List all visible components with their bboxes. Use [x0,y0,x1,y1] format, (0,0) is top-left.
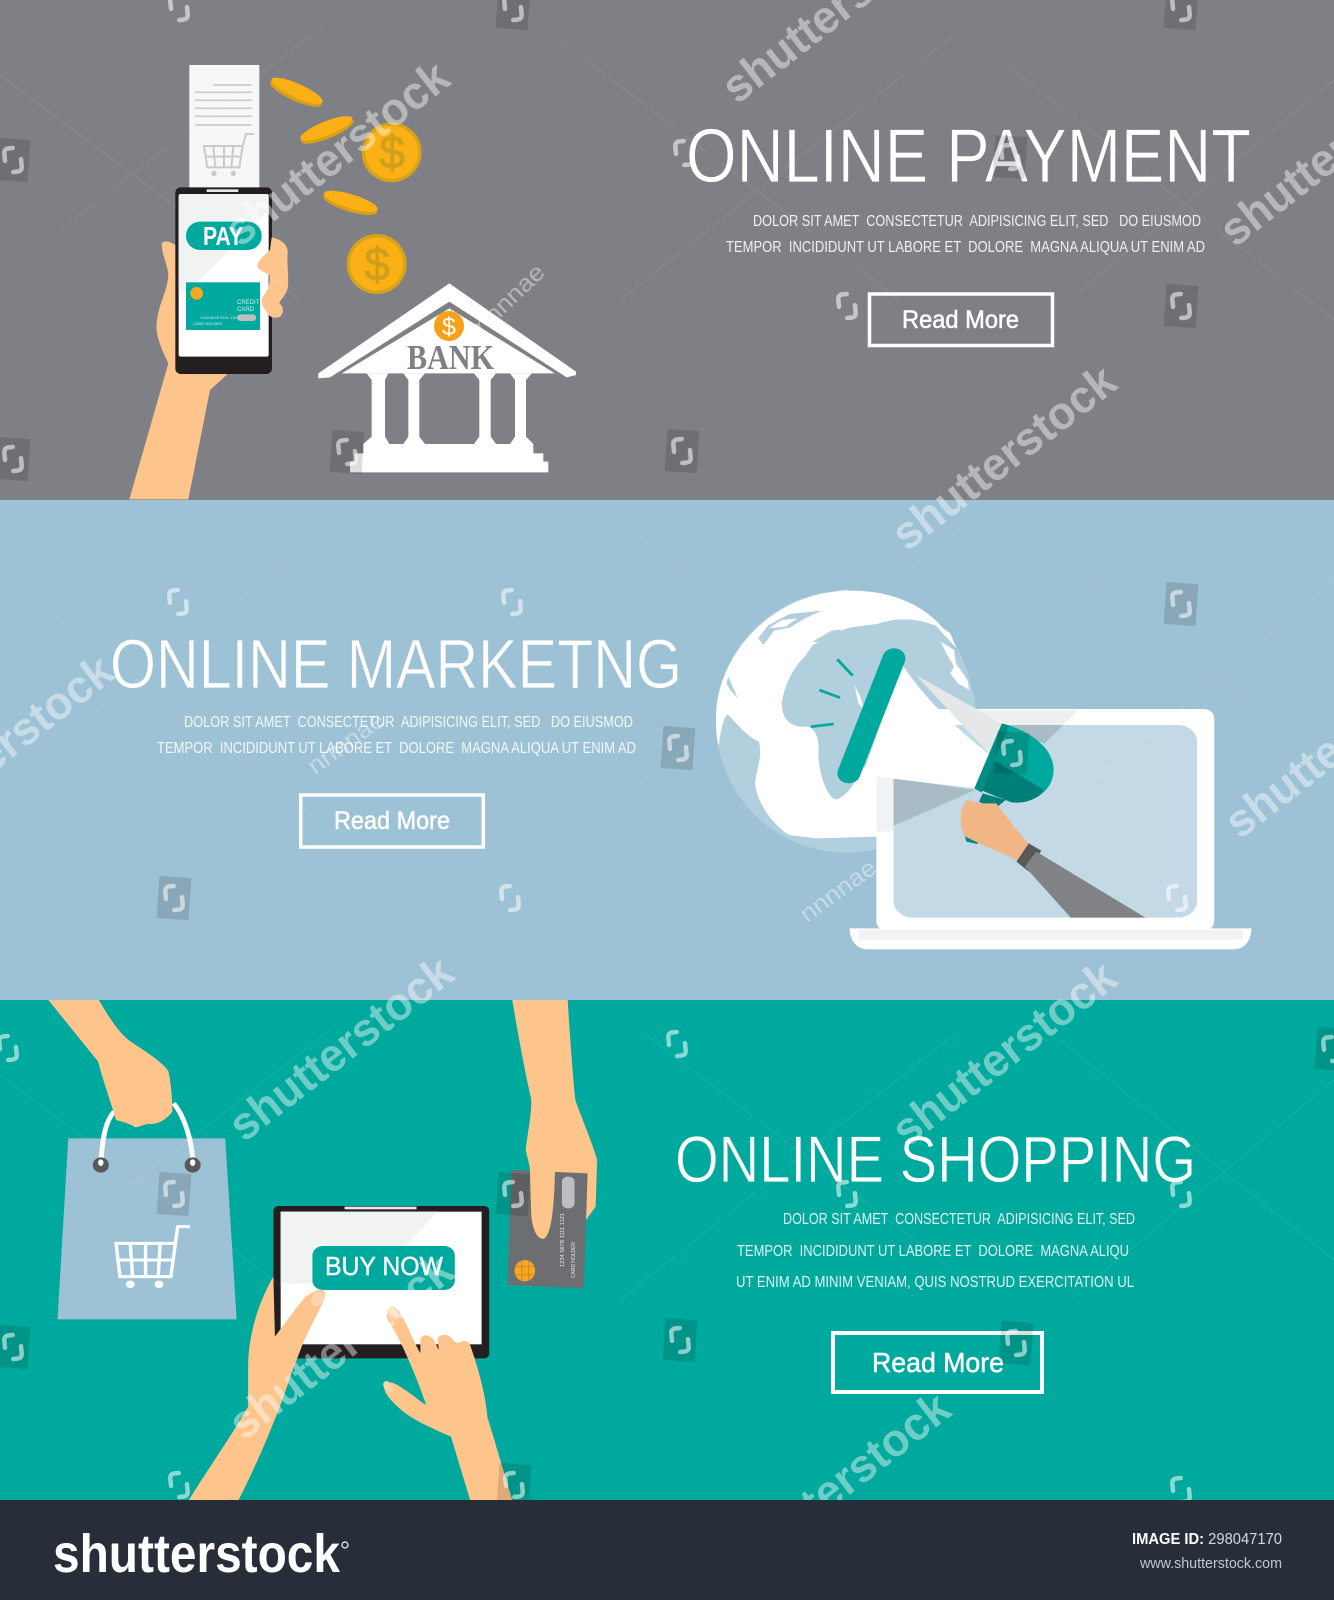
watermarks: shutterstock [881,354,1126,560]
card text: 1234 5678 1111 1121 [560,1213,566,1267]
button: read more [870,294,1052,346]
image id: IMAGE ID: 298047170 [1132,1531,1282,1548]
card text: CREDIT [237,300,260,306]
megaphone shadows [876,710,1078,832]
icon: bank building [318,283,576,472]
text block: DOLOR SIT AMET CONSECTETUR ADIPISICING ELIT, SED [783,1211,1135,1228]
website: www.shutterstock.com [1139,1555,1282,1572]
button: pay [186,222,262,250]
text block: TEMPOR INCIDIDUNT UT LABORE ET DOLORE MAGNA ALIQUA UT ENIM AD [157,740,636,757]
button: read more: Read More [902,306,1019,334]
watermarks: shutterstock [214,50,459,256]
icon: hand holding phone, back [129,241,227,499]
icon: round coins [347,122,422,294]
icon: flat coins [267,73,380,219]
panel: online shopping [0,1000,1334,1500]
card text: CARD [237,307,255,313]
text block: DOLOR SIT AMET CONSECTETUR ADIPISICING ELIT, SED DO EIUSMOD [184,714,633,731]
icon: megaphone [811,658,1054,844]
card text [193,300,260,326]
card text: CARD HOLDER [193,321,222,326]
text block: TEMPOR INCIDIDUNT UT LABORE ET DOLORE MAGNA ALIQU [737,1243,1129,1260]
label: buy now: BUY NOW [325,1251,443,1281]
text block [726,213,1205,256]
icon: credit card [508,1157,588,1288]
text block: UT ENIM AD MINIM VENIAM, QUIS NOSTRUD EXERCITATION UL [736,1274,1134,1291]
icon: left hand on tablet [189,1277,327,1500]
text block: TEMPOR INCIDIDUNT UT LABORE ET DOLORE MAGNA ALIQUA UT ENIM AD [726,239,1205,256]
title: ONLINE PAYMENT [686,114,1251,199]
icon: smartphone [175,187,272,374]
watermarks: shutterstock [218,945,463,1151]
button: read more [833,1333,1042,1392]
icon: receipt [189,65,259,188]
label: pay: PAY [203,221,243,251]
text block [736,1211,1135,1291]
icon: right hand pointing [381,1305,512,1500]
watermarks: shutterstock [715,1381,960,1587]
button: read more [301,795,483,847]
icon: hand behind card [512,1000,597,1222]
footer [0,1500,1334,1600]
icon: tablet [273,1206,489,1358]
watermarks: nnnnae [468,259,550,339]
title: ONLINE SHOPPING [675,1122,1196,1196]
icon: bank dollar badge: $ [442,313,456,341]
icon: credit card [186,282,260,330]
watermarks: nnnnae [303,706,390,780]
icon: arm holding megaphone [961,800,1145,918]
illustration: shopping hands, bag and tablet [48,1000,597,1500]
icon: globe [716,591,976,853]
button: read more: Read More [872,1347,1004,1378]
illustration: phone payment and bank [129,65,576,499]
footer logo: shutterstock [53,1524,341,1584]
icon: fingers [257,237,288,318]
illustration: globe, laptop and megaphone [716,591,1251,949]
watermarks: shutterstock [218,1243,463,1449]
icon: cart [116,1227,190,1287]
icon: shopping bag [58,1103,237,1319]
icon: coin dollar signs: $ [364,238,390,290]
icon: hand holding bag [48,1000,172,1127]
icon: coin dollar signs [364,126,405,290]
panel: online marketing [0,500,1334,1000]
icon: bank dollar badge [434,311,464,341]
label: bank: BANK [407,338,494,377]
text block [157,714,636,757]
title: ONLINE MARKETNG [110,625,682,703]
panel: online payment [0,0,1334,500]
icon: coin dollar signs: $ [379,126,405,178]
button: buy now [312,1246,455,1290]
card text: 1234 5678 9101 1121 [200,315,239,320]
button: read more: Read More [334,807,450,835]
card text: CARD HOLDER [571,1242,577,1278]
text block: DOLOR SIT AMET CONSECTETUR ADIPISICING ELIT, SED DO EIUSMOD [753,213,1201,230]
watermarks: shutterstock [881,950,1126,1156]
watermarks: nnnnae [795,854,882,928]
icon: laptop [850,709,1251,949]
card text [560,1213,577,1278]
